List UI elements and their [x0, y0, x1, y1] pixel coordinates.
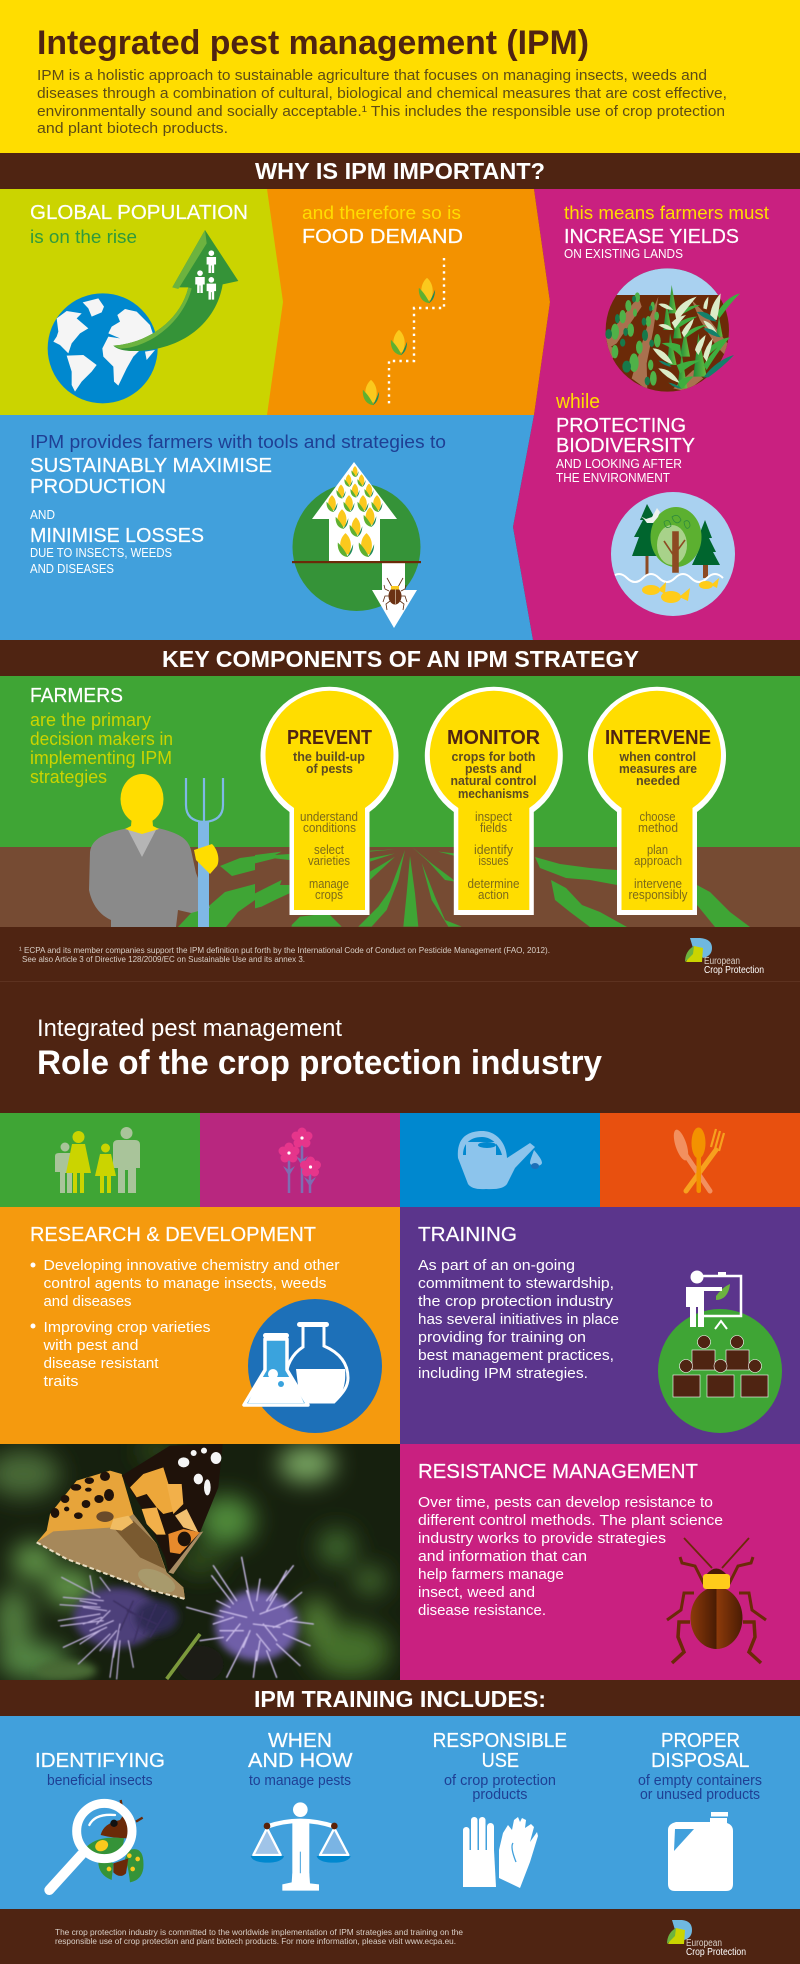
icon: jerry can [668, 1812, 733, 1891]
increase yields text [564, 203, 769, 261]
food demand text [302, 203, 463, 248]
farmers text: strategies [30, 767, 107, 787]
heading band: why is IPM important [0, 153, 800, 189]
icon: protective gloves [463, 1817, 538, 1888]
arrow: population rising [113, 230, 238, 351]
training text: best management practices, [418, 1347, 614, 1364]
keyhole: prevent: PREVENT [287, 727, 372, 749]
column: responsible use: of crop protection [444, 1773, 556, 1789]
logo: European Crop Protection: European [704, 956, 740, 967]
logo: European Crop Protection [685, 938, 764, 976]
keyhole: monitor: natural control [450, 773, 536, 788]
column: proper disposal: DISPOSAL [651, 1749, 750, 1772]
column: responsible use: products [472, 1787, 527, 1803]
keyhole: intervene: intervene [634, 877, 682, 891]
heading: role of the crop protection industry: Role of the crop protection industry [37, 1044, 602, 1082]
footer text [55, 1927, 463, 1946]
maximise production text: DUE TO INSECTS, WEEDS [30, 546, 172, 560]
keyhole: prevent: the build-up [293, 749, 365, 764]
panel: maximise production [0, 415, 534, 640]
icon: beetle [667, 1538, 766, 1663]
increase yields text: ON EXISTING LANDS [564, 247, 683, 261]
intro paragraph: diseases through a combination of cultural, biological and chemical measures that are cost effective, [37, 85, 727, 102]
biodiversity text [555, 391, 695, 485]
keyhole: monitor: identify [474, 843, 514, 857]
footnote: ¹ ECPA and its member companies support the IPM definition put forth by the International Code of Conduct on Pesticide Management (FAO, 2012). [19, 945, 550, 955]
research text: traits [44, 1373, 78, 1390]
research text: control agents to manage insects, weeds [44, 1275, 326, 1292]
column: when and how: WHEN [268, 1729, 332, 1752]
thistle flowers [37, 1557, 313, 1682]
intro paragraph: environmentally sound and socially acceptable.¹ This includes the responsible use of crop protection [37, 103, 725, 120]
keyhole: monitor: mechanisms [458, 786, 529, 801]
farmers text: FARMERS [30, 684, 123, 707]
keyhole: intervene: method [638, 821, 678, 835]
footnote: See also Article 3 of Directive 128/2009/EC on Sustainable Use and its annex 3. [22, 954, 305, 964]
keyhole: prevent: conditions [303, 821, 356, 835]
research text [30, 1223, 340, 1390]
keyhole: intervene: plan [647, 843, 668, 857]
keyhole: monitor: pests and [465, 761, 522, 776]
footer text: The crop protection industry is committed to the worldwide implementation of IPM strategies and training on the [55, 1927, 463, 1937]
biodiversity text: while [555, 391, 600, 413]
icon: globe and rising arrow [48, 230, 238, 403]
keyhole: intervene: responsibly [628, 888, 688, 902]
title: Integrated pest management (IPM) [37, 24, 589, 62]
increase yields text: INCREASE YIELDS [564, 225, 739, 248]
biodiversity text: PROTECTING [556, 414, 686, 437]
panel: training [400, 1207, 800, 1444]
dotted staircase with corn [363, 258, 444, 407]
resistance text: and information that can [418, 1548, 587, 1565]
keyhole: prevent: varieties [308, 854, 350, 868]
icon: family [55, 1127, 140, 1193]
heading band: why is IPM important: WHY IS IPM IMPORTANT? [255, 158, 545, 184]
resistance text: industry works to provide strategies [418, 1530, 666, 1547]
panel: increase yields [564, 203, 769, 393]
training text: providing for training on [418, 1329, 586, 1346]
logo: European Crop Protection: Crop Protection [704, 965, 764, 976]
panel: training topics [0, 1716, 800, 1909]
maximise production text: SUSTAINABLY MAXIMISE [30, 454, 272, 477]
icon strip [0, 1113, 800, 1207]
keyhole: monitor: inspect [475, 810, 512, 824]
panel: farmers and field [0, 676, 800, 927]
intro paragraph: IPM is a holistic approach to sustainable agriculture that focuses on managing insects, weeds and [37, 67, 707, 84]
research text: with pest and [42, 1337, 138, 1354]
keyhole: prevent: select [314, 843, 344, 857]
butterfly [37, 1444, 223, 1599]
training text: has several initiatives in place [418, 1311, 619, 1328]
keyhole: intervene: INTERVENE [605, 727, 711, 749]
maximise production text: IPM provides farmers with tools and strategies to [30, 432, 446, 452]
keyhole: monitor: fields [480, 821, 507, 835]
column: proper disposal [638, 1729, 762, 1891]
resistance text: disease resistance. [418, 1602, 546, 1619]
column: proper disposal: or unused products [640, 1787, 760, 1803]
photo: butterfly on thistle [0, 1441, 400, 1682]
training text: As part of an on-going [418, 1257, 575, 1274]
keyhole: intervene [588, 687, 726, 915]
icon: balance scales [251, 1802, 351, 1891]
column: when and how: AND HOW [248, 1749, 353, 1772]
keyhole: intervene: when control [619, 749, 696, 764]
research text: Developing innovative chemistry and other [44, 1257, 340, 1274]
training text [418, 1223, 619, 1382]
farmers text [30, 684, 173, 787]
keyhole: intervene: approach [634, 854, 682, 868]
column: identifying: beneficial insects [47, 1773, 152, 1789]
keyhole: prevent [260, 687, 398, 915]
maximise production text: AND [30, 508, 55, 522]
research text: Improving crop varieties [44, 1319, 210, 1336]
column: identifying: IDENTIFYING [35, 1749, 165, 1772]
keyhole: intervene: measures are [619, 761, 697, 776]
maximise production text: MINIMISE LOSSES [30, 524, 204, 547]
increase yields text: this means farmers must [564, 203, 769, 223]
keyhole: prevent: of pests [306, 761, 353, 776]
keyhole: monitor: determine [468, 877, 520, 891]
panel: research and development [0, 1207, 400, 1444]
biodiversity text: THE ENVIRONMENT [556, 471, 670, 485]
footnote [19, 945, 550, 964]
panel: resistance management [400, 1444, 800, 1680]
keyhole: monitor: action [478, 888, 509, 902]
heading band: IPM training includes: IPM TRAINING INCLUDES: [254, 1686, 546, 1712]
keyhole: prevent: manage [309, 877, 349, 891]
icon: cutlery [671, 1128, 724, 1193]
keyhole: monitor: MONITOR [447, 727, 541, 749]
column: when and how [248, 1729, 353, 1891]
keyhole: intervene: needed [636, 773, 680, 788]
keyhole: prevent: understand [300, 810, 358, 824]
training text: commitment to stewardship, [418, 1275, 614, 1292]
column: responsible use [433, 1729, 567, 1888]
food demand text: FOOD DEMAND [302, 225, 463, 248]
panel: protecting biodiversity and increase yields background [513, 189, 800, 640]
heading band: key components: KEY COMPONENTS OF AN IPM STRATEGY [162, 646, 639, 672]
biodiversity text: BIODIVERSITY [556, 434, 695, 457]
intro paragraph: and plant biotech products. [37, 120, 228, 137]
footer text: responsible use of crop protection and plant biotech products. For more information, please visit www.ecpa.eu. [55, 1936, 456, 1946]
column: proper disposal: of empty containers [638, 1773, 762, 1789]
resistance text: help farmers manage [418, 1566, 564, 1583]
resistance text: RESISTANCE MANAGEMENT [418, 1460, 698, 1483]
panel: food demand [267, 189, 550, 415]
column: proper disposal: PROPER [661, 1729, 740, 1752]
heading: role of the crop protection industry [37, 1015, 602, 1082]
column: when and how: to manage pests [249, 1773, 351, 1789]
column: identifying [35, 1749, 165, 1890]
icon: forest and water [611, 492, 735, 616]
icon: flowers [278, 1128, 321, 1193]
farmers text: are the primary [30, 710, 151, 730]
global population text: GLOBAL POPULATION [30, 201, 248, 224]
resistance text: Over time, pests can develop resistance to [418, 1494, 713, 1511]
column: responsible use: USE [482, 1749, 519, 1772]
training text: including IPM strategies. [418, 1365, 588, 1382]
globe [48, 293, 158, 403]
global population text: is on the rise [30, 227, 137, 247]
research text: RESEARCH & DEVELOPMENT [30, 1223, 316, 1246]
farmers text: implementing IPM [30, 748, 172, 768]
maximise production text: AND DISEASES [30, 562, 114, 576]
panel: protecting biodiversity [555, 391, 735, 616]
icon: laboratory flasks [244, 1299, 382, 1433]
logo: European Crop Protection footer: European [686, 1938, 722, 1949]
training text: the crop protection industry [418, 1293, 614, 1310]
heading band: key components [0, 640, 800, 676]
icon: training session [658, 1270, 782, 1433]
keyhole: intervene: choose [640, 810, 676, 824]
research text: and diseases [44, 1293, 132, 1310]
icon: crop field [603, 267, 740, 393]
resistance text: different control methods. The plant science [418, 1512, 723, 1529]
keyhole: prevent: crops [315, 888, 343, 902]
keyhole: monitor: issues [478, 854, 508, 868]
keyhole: monitor: crops for both [452, 749, 536, 764]
farmers text: decision makers in [30, 729, 173, 749]
global population text [30, 201, 248, 247]
intro paragraph [37, 67, 727, 137]
icon: small beetle [383, 578, 407, 610]
heading band: IPM training includes [0, 1680, 800, 1716]
training text: TRAINING [418, 1223, 517, 1246]
icon: watering can [458, 1131, 542, 1189]
maximise production text: PRODUCTION [30, 475, 166, 498]
logo: European Crop Protection footer: Crop Protection [686, 1947, 746, 1958]
logo: European Crop Protection footer [667, 1920, 746, 1958]
icon: farmer with fork [89, 774, 223, 927]
keyhole: monitor [425, 687, 563, 915]
research text: disease resistant [44, 1355, 159, 1372]
biodiversity text: AND LOOKING AFTER [556, 457, 682, 471]
panel: global population [0, 189, 283, 415]
heading: role of the crop protection industry: Integrated pest management [37, 1015, 342, 1042]
food demand text: and therefore so is [302, 203, 461, 223]
maximise production text [30, 432, 446, 576]
field soil and crop rows [0, 847, 800, 927]
resistance text: insect, weed and [418, 1584, 535, 1601]
resistance text [418, 1460, 723, 1619]
panel: introduction [0, 0, 800, 153]
column: responsible use: RESPONSIBLE [433, 1729, 567, 1752]
icon: magnifier and ladybird [49, 1800, 143, 1890]
icon: yield up, losses down [292, 462, 421, 628]
